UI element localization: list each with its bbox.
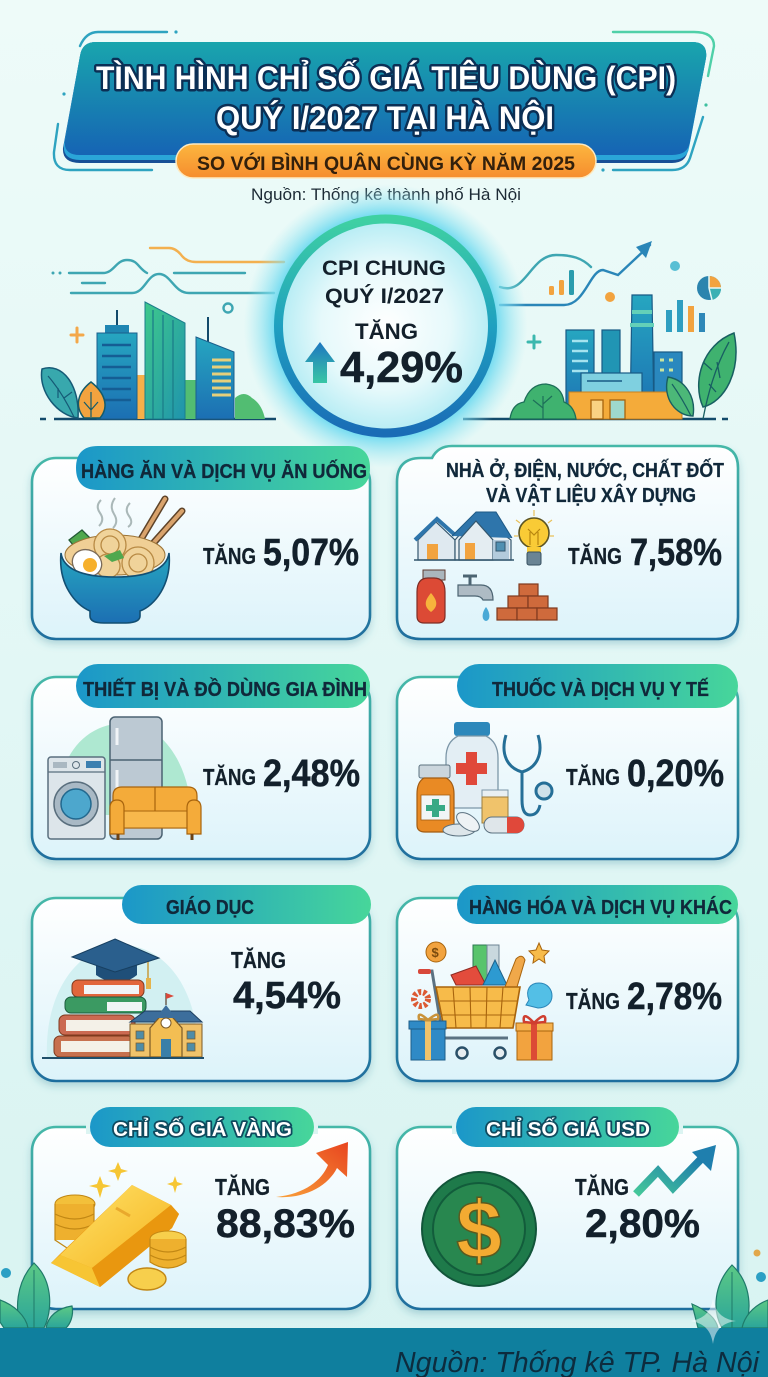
leaves left (41, 368, 265, 419)
heading (446, 458, 724, 507)
icon: books, cap and school (42, 939, 204, 1058)
CPI label: QUÝ I/2027 (325, 284, 444, 308)
icon: up arrow (305, 342, 335, 383)
heading: THUỐC VÀ DỊCH VỤ Y TẾ (492, 677, 709, 701)
left city illustration (41, 248, 284, 419)
heading (457, 664, 738, 708)
value: 2,80% (585, 1202, 700, 1246)
value (566, 976, 722, 1018)
panel: USD (397, 1107, 738, 1309)
value: 0,20% (627, 753, 724, 795)
heading (76, 446, 370, 490)
CPI label (322, 257, 446, 344)
value: 2,48% (263, 753, 360, 795)
subtitle pill (176, 144, 596, 178)
value: 88,83% (216, 1202, 355, 1246)
bush and leaves right (510, 333, 736, 419)
heading: NHÀ Ở, ĐIỆN, NƯỚC, CHẤT ĐỐT (446, 458, 724, 482)
panel: household appliances (32, 664, 370, 859)
title banner (54, 30, 714, 172)
title text: TÌNH HÌNH CHỈ SỐ GIÁ TIÊU DÙNG (CPI) (96, 60, 676, 96)
icon: gas cylinder (417, 570, 445, 623)
subtitle pill: SO VỚI BÌNH QUÂN CÙNG KỲ NĂM 2025 (197, 151, 575, 175)
value: TĂNG (575, 1173, 629, 1200)
title text (96, 60, 676, 136)
value (203, 532, 359, 574)
source line: Nguồn: Thống kê thành phố Hà Nội (251, 185, 521, 204)
icon: shopping cart (409, 942, 553, 1060)
icon: dollar coin (422, 1172, 536, 1286)
panel: food (32, 446, 370, 639)
watermark star (690, 1298, 736, 1344)
ground line (40, 418, 728, 420)
value: TĂNG (566, 763, 620, 790)
panel: other goods (397, 885, 738, 1081)
CPI label: TĂNG (355, 319, 418, 344)
leaves bottom right (692, 1250, 768, 1328)
icon: light bulb (514, 510, 554, 565)
panel: medicine (397, 664, 738, 859)
icon: rising arrow (276, 1142, 348, 1197)
value (231, 946, 341, 1017)
CPI circle (244, 184, 528, 468)
value: 7,58% (630, 532, 722, 574)
value (566, 753, 724, 795)
value: 2,78% (627, 976, 722, 1018)
value: TĂNG (566, 987, 620, 1014)
heading (457, 885, 738, 924)
icon: dollar coin: $ (456, 1185, 502, 1276)
CPI label: CPI CHUNG (322, 257, 446, 280)
bar chart (666, 300, 705, 332)
heading: CHỈ SỐ GIÁ VÀNG (113, 1117, 292, 1141)
title text: QUÝ I/2027 TẠI HÀ NỘI (216, 100, 554, 136)
icon: bricks (497, 584, 557, 620)
right economy and factory illustration (500, 241, 736, 419)
value: TĂNG (568, 542, 622, 569)
heading: VÀ VẬT LIỆU XÂY DỰNG (486, 483, 696, 507)
heading (452, 1107, 683, 1147)
value (203, 753, 360, 795)
pie chart (697, 276, 721, 300)
value: 5,07% (263, 532, 359, 574)
panel: gold (32, 1107, 370, 1309)
value: TĂNG (215, 1173, 270, 1200)
icon: zigzag arrow (636, 1145, 716, 1194)
leaves bottom left (0, 1263, 73, 1328)
icon: shopping cart: $ (432, 945, 440, 960)
panel: education (32, 885, 371, 1081)
icon: gold bar and coins (51, 1162, 186, 1290)
icon: appliances (48, 717, 201, 840)
value: TĂNG (203, 763, 256, 790)
footer bar (0, 1328, 768, 1377)
heading: HÀNG ĂN VÀ DỊCH VỤ ĂN UỐNG (81, 459, 367, 483)
value (215, 1173, 355, 1246)
value: TĂNG (231, 946, 286, 973)
value: TĂNG (203, 542, 256, 569)
value (568, 532, 722, 574)
heading: GIÁO DỤC (166, 896, 254, 919)
value (575, 1173, 700, 1246)
icon: tap (458, 576, 493, 621)
value: 4,54% (233, 975, 341, 1017)
heading: THIẾT BỊ VÀ ĐỒ DÙNG GIA ĐÌNH (83, 677, 367, 701)
icon: noodle bowl (61, 498, 182, 623)
icon: houses (414, 512, 514, 560)
heading (122, 885, 371, 924)
panel: housing (397, 446, 738, 639)
heading: CHỈ SỐ GIÁ USD (486, 1117, 650, 1141)
heading (76, 664, 370, 708)
heading (86, 1107, 318, 1147)
heading: HÀNG HÓA VÀ DỊCH VỤ KHÁC (469, 895, 732, 919)
CPI value: 4,29% (340, 343, 463, 392)
icon: medicine (417, 722, 552, 836)
